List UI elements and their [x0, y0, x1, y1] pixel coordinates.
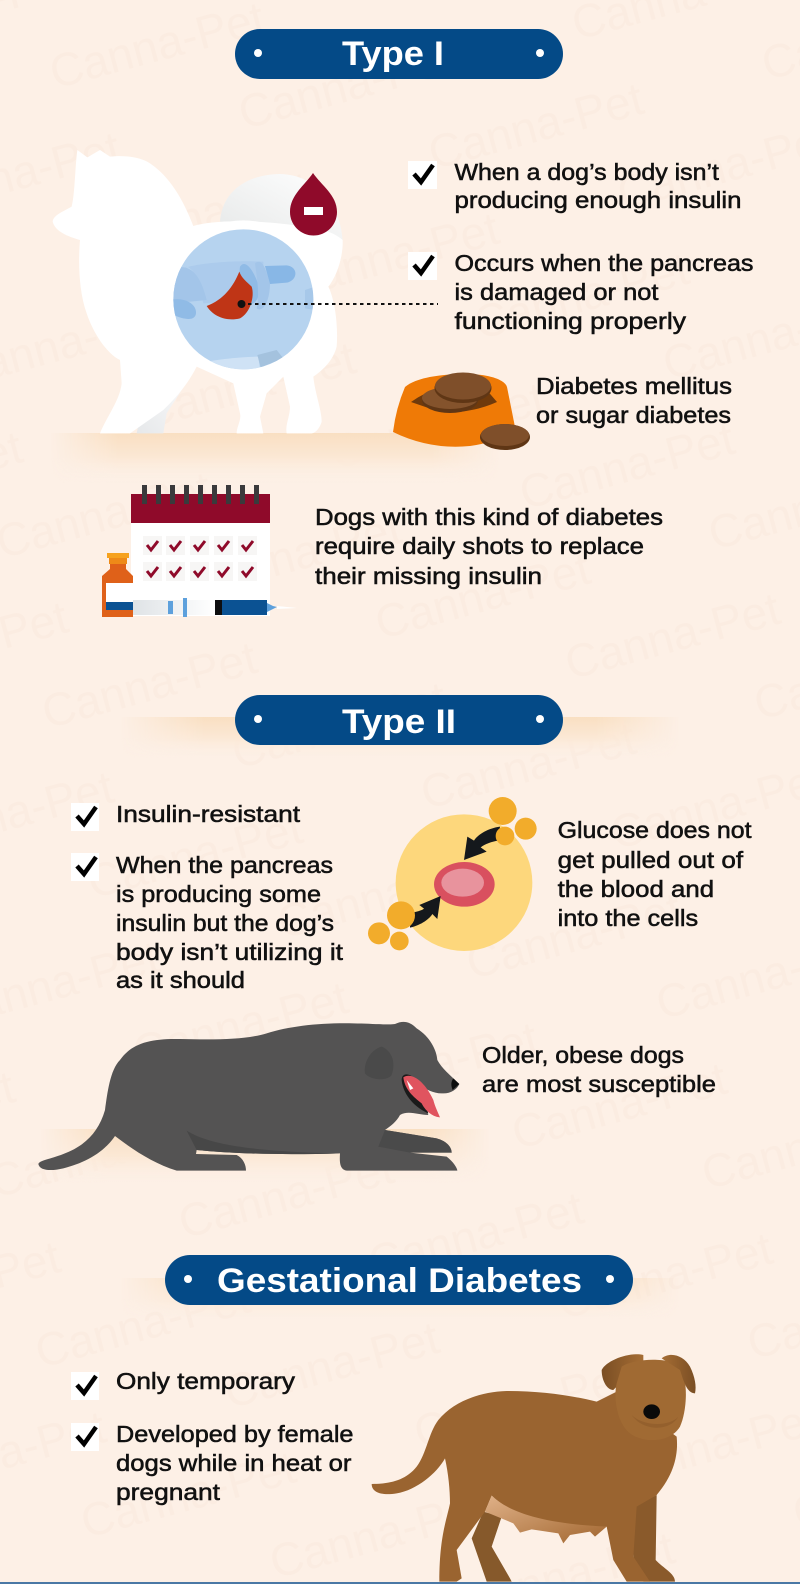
text: older obese dogs: Older, obese dogs	[482, 1042, 684, 1068]
text: pancreas producing some insulin: is producing some	[116, 881, 321, 907]
text: body isn't producing insulin: producing enough insulin	[454, 187, 742, 213]
text: pancreas producing some insulin: When the pancreas	[116, 852, 333, 878]
text: pancreas damaged: Occurs when the pancreas	[454, 250, 754, 276]
checkbox	[408, 252, 437, 280]
glow behind Gestational heading	[139, 1278, 659, 1306]
calendar	[131, 485, 270, 616]
text: pancreas producing some insulin: body isn’t utilizing it	[116, 939, 344, 965]
checkbox	[71, 853, 99, 881]
text: female dogs	[116, 1421, 354, 1505]
pointer: dotted line from pancreas	[238, 300, 438, 308]
text: female dogs: dogs while in heat or	[116, 1450, 352, 1476]
text: female dogs: pregnant	[116, 1479, 221, 1505]
text: diabetes mellitus: or sugar diabetes	[536, 402, 731, 428]
checkbox	[71, 803, 99, 831]
text: pancreas damaged: is damaged or not	[454, 279, 659, 305]
text: glucose: Glucose does not	[558, 817, 752, 843]
text: glucose: the blood and	[558, 876, 714, 902]
heading: Type II	[235, 695, 563, 745]
icon: blood drop with minus	[290, 173, 337, 236]
text: daily shots	[315, 504, 663, 589]
text: pancreas producing some insulin: as it should	[116, 967, 245, 993]
heading: Type II: Type II	[342, 703, 456, 741]
text: daily shots: require daily shots to replace	[315, 533, 644, 559]
text: body isn't producing insulin: When a dog’s body isn’t	[454, 159, 719, 185]
checkbox	[71, 1372, 99, 1400]
text: insulin-resistant: Insulin-resistant	[116, 801, 301, 827]
illustration: calendar, insulin vial and syringe	[102, 485, 297, 617]
text: daily shots: their missing insulin	[315, 563, 542, 589]
text: diabetes mellitus: Diabetes mellitus	[536, 373, 732, 399]
text: older obese dogs: are most susceptible	[482, 1071, 716, 1097]
ground shadow: obese dog	[55, 1129, 475, 1166]
text: pancreas damaged: functioning properly	[454, 308, 686, 334]
insulin vial	[102, 553, 133, 617]
checkbox	[71, 1423, 99, 1451]
illustration: obese grey dog	[38, 1022, 459, 1171]
glow behind Type II heading	[139, 717, 661, 744]
ground shadow: white dog	[65, 433, 480, 466]
text: glucose	[558, 817, 752, 931]
text: daily shots: Dogs with this kind of diabetes	[315, 504, 663, 530]
text: glucose: get pulled out of	[558, 847, 744, 873]
icon: pancreas	[207, 272, 253, 319]
checkbox	[408, 161, 437, 189]
illustration: white dog with pancreas lens	[53, 150, 343, 433]
text: only temporary: Only temporary	[116, 1368, 295, 1394]
text: pancreas producing some insulin: insulin but the dog’s	[116, 910, 334, 936]
text: pancreas producing some insulin	[116, 852, 344, 993]
text: female dogs: Developed by female	[116, 1421, 354, 1447]
heading: Gestational Diabetes	[165, 1255, 633, 1305]
heading: Type I	[235, 29, 563, 79]
illustration: glucose and cell	[368, 797, 537, 951]
heading: Type I: Type I	[342, 35, 444, 73]
text: glucose: into the cells	[558, 905, 698, 931]
illustration: pregnant brown dog	[372, 1354, 696, 1582]
text: older obese dogs	[482, 1042, 716, 1097]
text: body isn't producing insulin	[454, 159, 742, 213]
text: diabetes mellitus	[536, 373, 732, 428]
illustration: food bowl with cookies	[393, 372, 530, 450]
bottom edge line	[0, 1582, 800, 1584]
text: pancreas damaged	[454, 250, 754, 334]
heading: Gestational Diabetes: Gestational Diabetes	[217, 1262, 582, 1300]
syringe	[133, 598, 297, 617]
